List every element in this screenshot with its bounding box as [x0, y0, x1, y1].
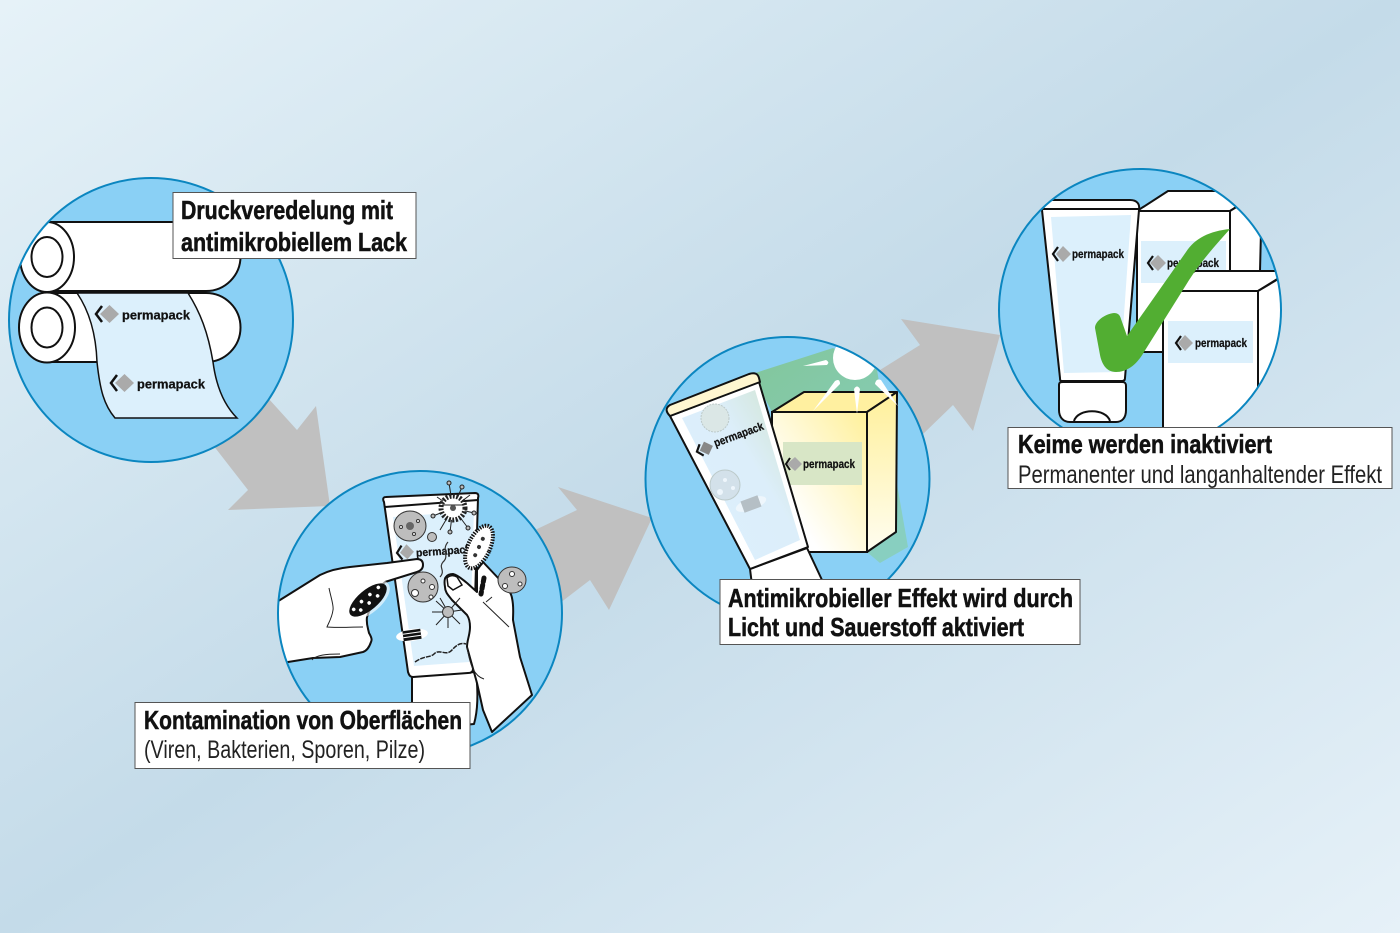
label: contamination step: [135, 702, 470, 768]
rollers and printed sheet: [19, 222, 240, 418]
light cone, box, tube and sun: [667, 336, 908, 585]
boxes and tube: [1041, 190, 1280, 427]
faded spore two: [710, 470, 740, 500]
circle background: [278, 471, 562, 755]
label: contamination step: (Viren, Bakterien, Sporen, Pilze): [144, 736, 425, 764]
label: printing step: antimikrobiellem Lack: [181, 227, 407, 257]
arrow: contamination to activation: [535, 487, 652, 610]
tube logo: [695, 421, 767, 458]
panel: light and oxygen activation: [646, 336, 930, 621]
tube logo: permapack: [712, 421, 766, 450]
faded spore one: [701, 404, 729, 432]
icon: black oval bacterium: [344, 578, 392, 622]
arrow: activation to inactivated: [880, 319, 1000, 435]
arrow: printing to contamination: [213, 398, 330, 510]
icon: striped bacterium: [395, 627, 429, 643]
circle background: [9, 178, 293, 462]
icon: virus centre: [432, 598, 462, 628]
panel: germs inactivated: [998, 168, 1282, 427]
icon: worm: [415, 644, 466, 662]
icon: spore upper: [394, 511, 426, 541]
label: activation step: Antimikrobieller Effekt wird durch: [728, 583, 1073, 613]
box logo: permapack: [803, 459, 856, 471]
tube logo: [1053, 246, 1125, 262]
back box logo: [1148, 255, 1220, 271]
tube logo: permapack: [1072, 249, 1125, 261]
label: activation step: Licht und Sauerstoff aktiviert: [728, 612, 1024, 642]
front box logo: [1176, 335, 1248, 351]
back box logo: permapack: [1167, 258, 1220, 270]
icon: virus top: [431, 481, 476, 534]
panel: printing rollers: [9, 178, 293, 462]
circle background: [999, 169, 1281, 451]
label: printing step: Druckveredelung mit: [181, 195, 393, 225]
icon: spore centre: [408, 572, 438, 602]
front box logo: permapack: [1195, 338, 1248, 350]
hands and tube: [270, 493, 532, 732]
circle background: [646, 337, 930, 621]
circle outline: [999, 169, 1281, 451]
icon: chain bacterium: [481, 578, 484, 594]
icon: squiggle: [440, 542, 448, 577]
circle outline: [646, 337, 930, 621]
label: inactivation step: Keime werden inaktiviert: [1018, 429, 1272, 459]
faded striped bacterium: [734, 493, 768, 515]
logo on sheet, upper: permapack: [122, 308, 191, 322]
panel: surface contamination: [270, 471, 562, 755]
icon: bristled bacterium: [459, 522, 499, 572]
box logo: [786, 457, 856, 471]
logo on sheet, upper: [96, 305, 191, 323]
tube logo: [396, 540, 472, 561]
logo on sheet, lower: [111, 374, 206, 392]
icon: small spore: [428, 532, 436, 542]
label: activation step: [720, 580, 1080, 644]
circle outline: [9, 178, 293, 462]
icon: green check mark: [1095, 229, 1230, 372]
label: printing step: [173, 192, 416, 258]
circle outline: [278, 471, 562, 755]
tube logo: permapack: [416, 544, 472, 560]
label: inactivation step: [1008, 428, 1392, 489]
logo on sheet, lower: permapack: [137, 376, 206, 392]
icon: spore right: [498, 567, 526, 593]
label: contamination step: Kontamination von Oberflächen: [144, 705, 462, 735]
